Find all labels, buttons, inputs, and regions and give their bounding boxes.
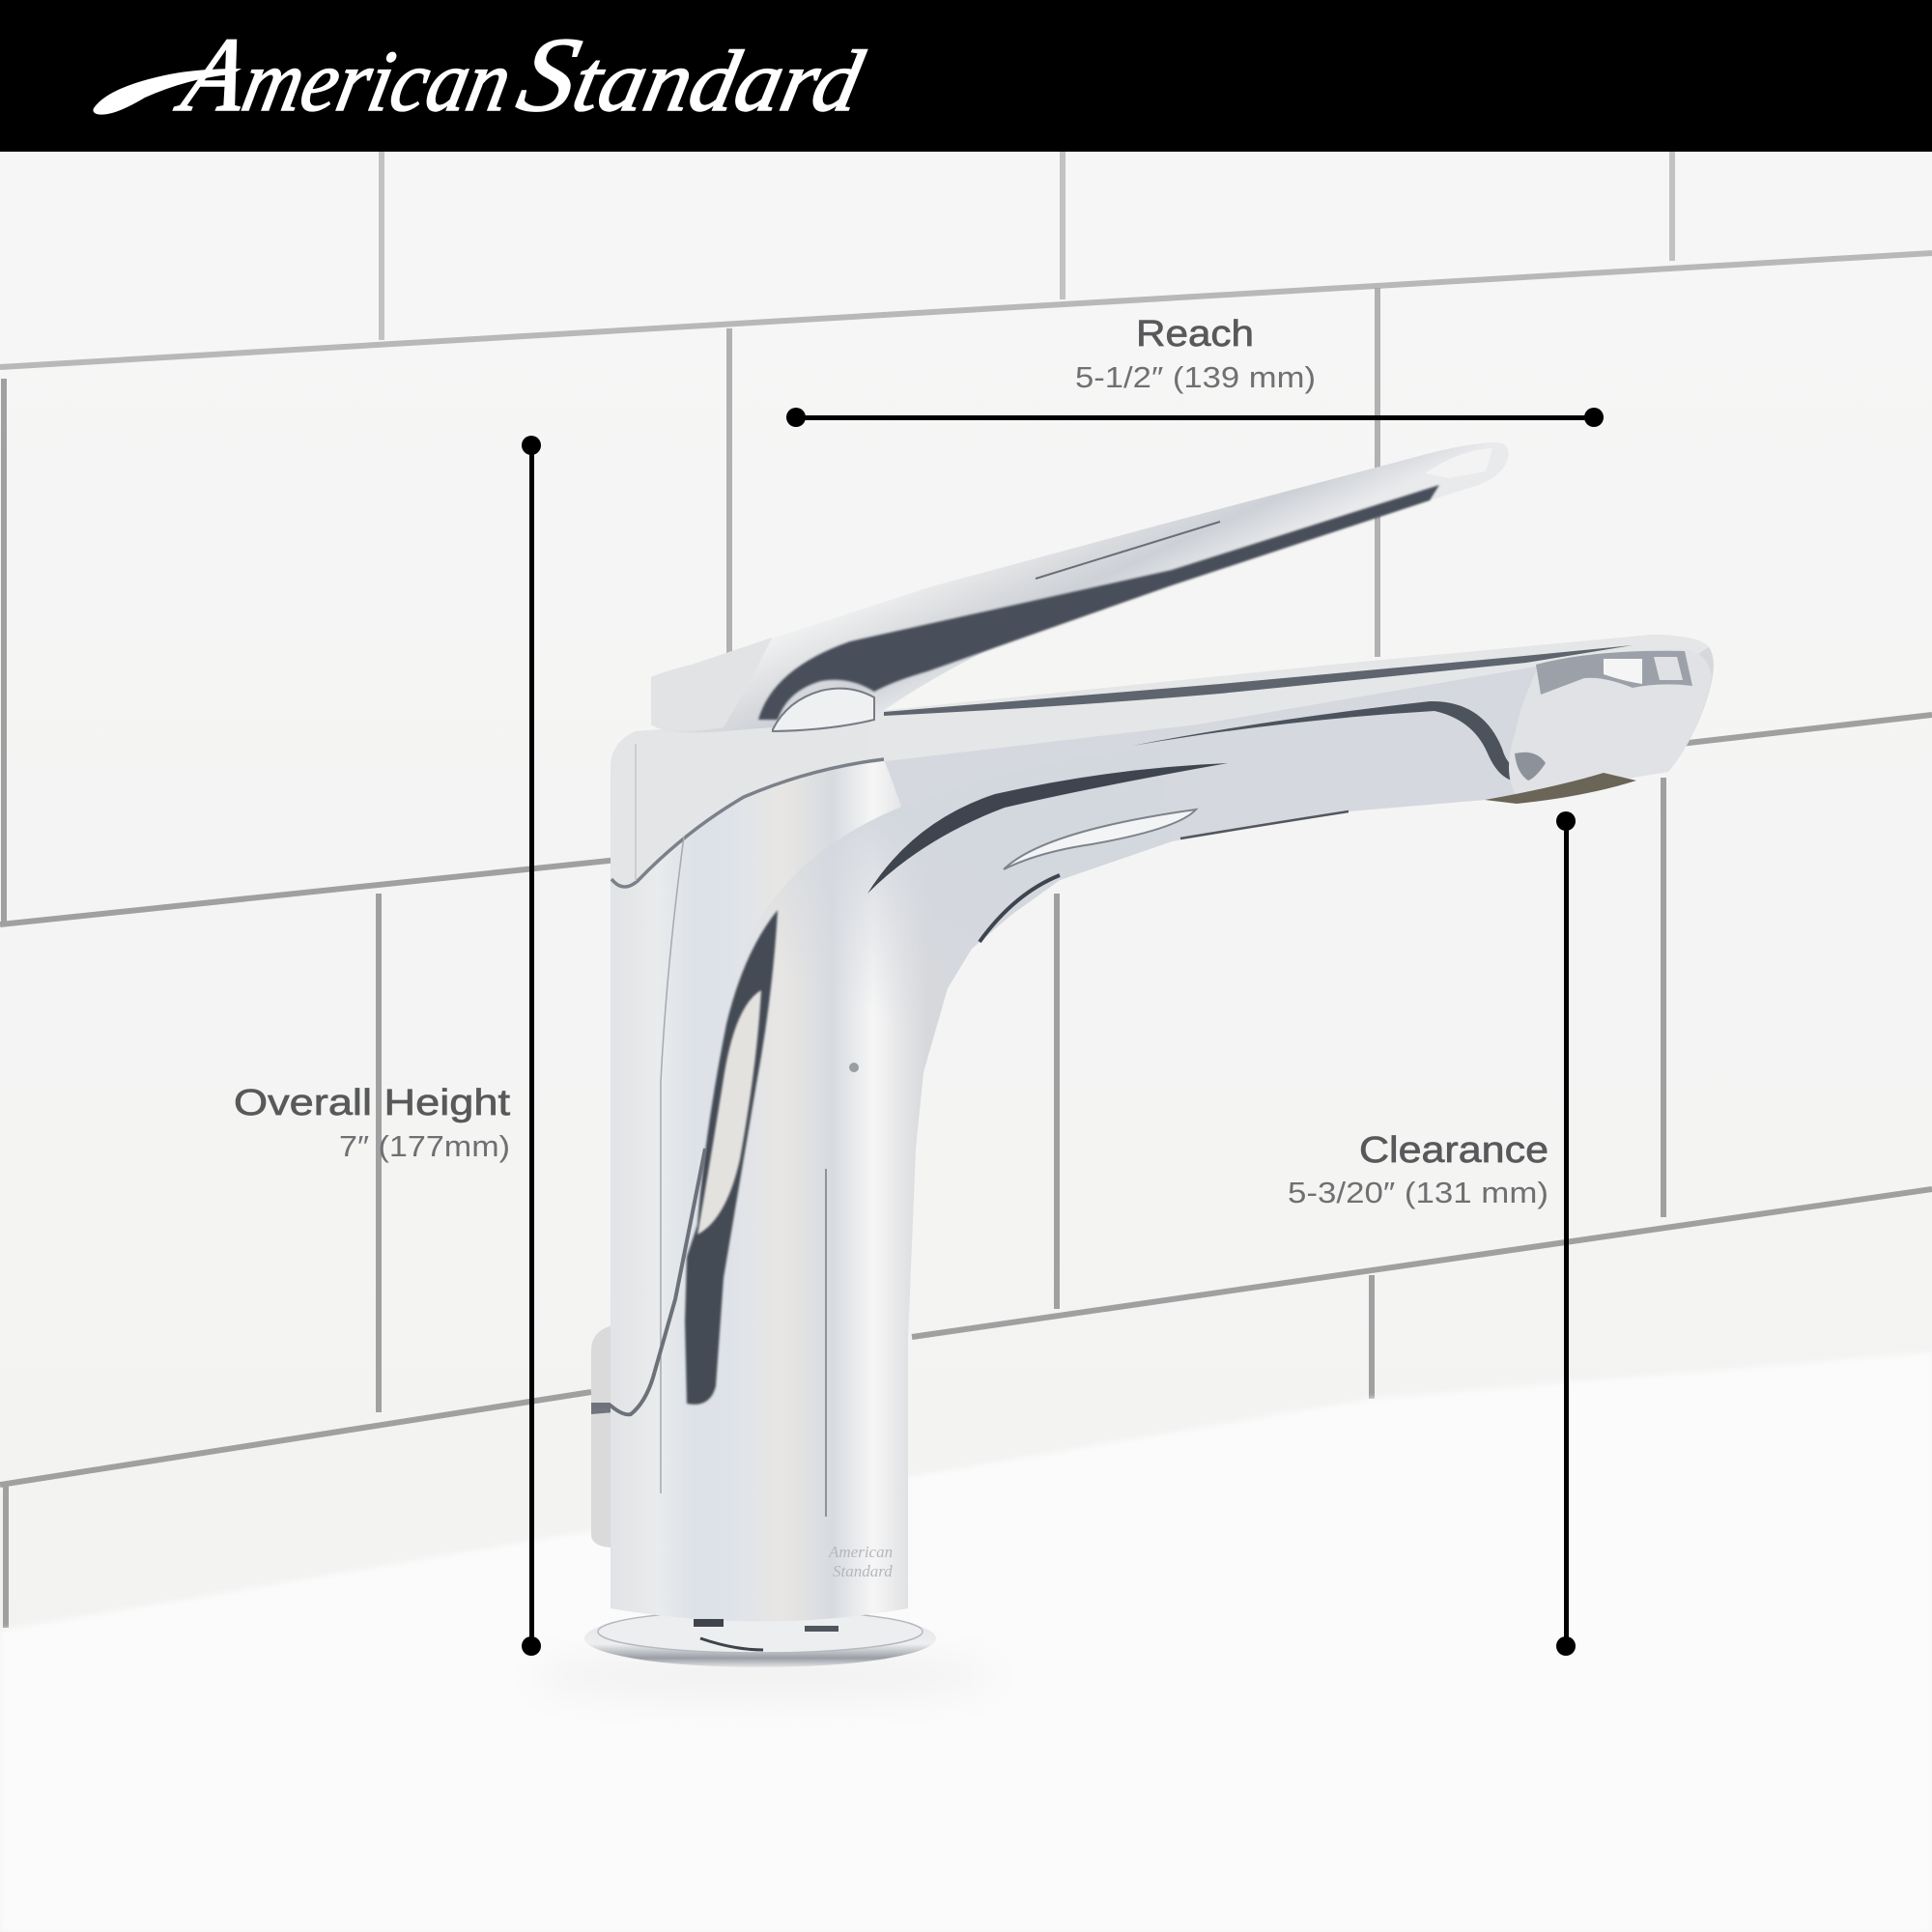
logo wordmark: Standard bbox=[509, 16, 874, 134]
clearance value: 5-3/20″ (131 mm) bbox=[1288, 1176, 1548, 1209]
handle pivot bbox=[773, 689, 874, 731]
ledge dark line bbox=[884, 645, 1633, 716]
logo wordmark bbox=[93, 16, 874, 134]
handle wedge bbox=[651, 638, 772, 731]
header band bbox=[0, 0, 1932, 152]
drain lever at back bbox=[591, 1325, 614, 1548]
clearance dimension bbox=[1288, 811, 1576, 1656]
spout under-face bbox=[734, 749, 1172, 1063]
spout top ledge bbox=[869, 635, 1709, 763]
body and spout bbox=[591, 635, 1714, 1650]
overall height line bbox=[522, 436, 541, 1656]
faucet bbox=[584, 442, 1714, 1667]
reach dimension bbox=[786, 314, 1604, 427]
engraved logo on faucet: Standard bbox=[833, 1562, 893, 1580]
base chrome reflections bbox=[694, 1619, 838, 1650]
clearance line bbox=[1556, 811, 1576, 1656]
logo wordmark: American bbox=[167, 16, 524, 134]
handle lever bbox=[651, 442, 1509, 732]
handle dark stripe bbox=[758, 485, 1439, 720]
spout dark reflection upper bbox=[1132, 701, 1531, 781]
light window in reflection bbox=[697, 990, 761, 1235]
aerator bbox=[1485, 773, 1636, 804]
curved reflection line lower bbox=[591, 1149, 705, 1414]
reach heading: Reach bbox=[1136, 314, 1254, 355]
base flange bbox=[584, 1609, 936, 1667]
spout oval highlight bbox=[1004, 810, 1196, 869]
overall height heading: Overall Height bbox=[234, 1083, 511, 1123]
clearance heading: Clearance bbox=[1359, 1130, 1548, 1171]
spout base fill bbox=[884, 667, 1536, 988]
reach value: 5-1/2″ (139 mm) bbox=[1075, 360, 1316, 394]
engraved logo on faucet: American bbox=[828, 1543, 893, 1561]
column vertical glints bbox=[825, 1169, 827, 1517]
body seam curve bbox=[611, 759, 884, 887]
overall height value: 7″ (177mm) bbox=[339, 1129, 510, 1163]
left body panel bbox=[611, 712, 892, 887]
large dark reflection on column bbox=[685, 910, 778, 1405]
overall height dimension bbox=[234, 436, 541, 1656]
engraved logo on faucet bbox=[828, 1543, 893, 1580]
reach line bbox=[786, 408, 1604, 427]
spout dark streak bbox=[867, 763, 1228, 894]
countertop bbox=[0, 1352, 1932, 1932]
nozzle bbox=[1509, 649, 1712, 797]
